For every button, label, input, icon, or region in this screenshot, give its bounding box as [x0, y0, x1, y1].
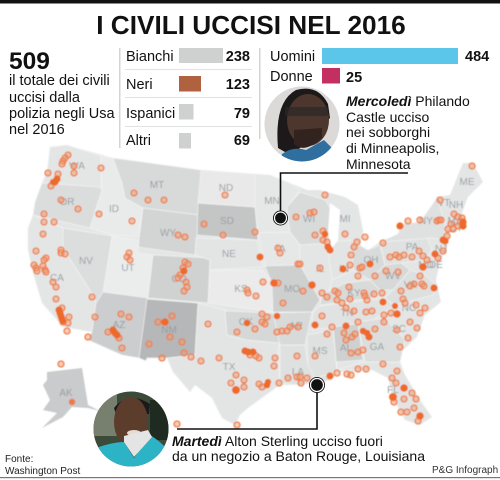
chart: victims by gender: Uomini [270, 49, 315, 65]
state labels: GA [370, 342, 385, 353]
state labels: SC [392, 324, 406, 335]
caption: Philando Castile [346, 93, 470, 172]
chart: victims by gender: 25 [346, 70, 362, 86]
caption: Philando Castile: Mercoledì Philando [346, 93, 470, 109]
chart: victims by ethnicity: 69 [234, 133, 250, 149]
state labels: AL [340, 343, 353, 354]
photo: Alton Sterling [93, 391, 170, 467]
state labels: IN [339, 264, 349, 275]
total figure: 509 [9, 48, 116, 138]
state labels: LA [292, 367, 304, 378]
state labels: WV [385, 271, 401, 282]
source: Washington Post [5, 466, 80, 477]
state labels: AZ [113, 320, 125, 331]
shooting location dots [31, 152, 475, 428]
chart: victims by gender [259, 48, 489, 139]
state labels: NC [402, 303, 416, 314]
chart: victims by ethnicity: Bianchi [126, 49, 174, 65]
total figure: 509: uccisi dalla [9, 90, 81, 106]
photo: Philando Castile [264, 86, 340, 162]
state labels: SD [220, 216, 234, 227]
US map [28, 145, 483, 428]
state labels: TX [223, 362, 236, 373]
state labels: WI [303, 214, 315, 225]
chart: victims by ethnicity: 123 [226, 77, 250, 93]
state labels: WA [69, 161, 85, 172]
state labels: IL [316, 264, 325, 275]
state labels: IA [276, 244, 286, 255]
state labels: MS [312, 346, 328, 357]
source: Fonte: [5, 454, 33, 465]
state labels: NE [222, 249, 236, 260]
caption: Philando Castile: Minnesota [346, 156, 411, 172]
state labels [50, 161, 475, 396]
state labels: OH [364, 255, 378, 266]
chart: victims by ethnicity: Altri [126, 133, 151, 149]
title: I CIVILI UCCISI NEL 2016 [96, 10, 406, 40]
state labels: ME [460, 177, 475, 188]
chart: victims by gender: Donne [270, 69, 313, 85]
state labels: OK [239, 317, 254, 328]
chart: victims by ethnicity: Ispanici [126, 106, 175, 122]
caption: Philando Castile: nei sobborghi [346, 124, 430, 140]
state labels: CO [172, 274, 187, 285]
state labels: WY [160, 228, 176, 239]
chart: victims by gender: 484 [465, 49, 489, 65]
total figure: 509: 509 [9, 48, 50, 75]
state labels: FL [387, 385, 399, 396]
chart: victims by ethnicity: 79 [234, 106, 250, 122]
chart: victims by ethnicity [119, 48, 252, 149]
Alaska [42, 368, 100, 428]
caption: Alton Sterling: Martedì Alton Sterling ucciso fuori [172, 433, 383, 449]
credit: P&G Infograph [432, 465, 498, 476]
state labels: ND [219, 183, 233, 194]
state labels: NM [161, 325, 177, 336]
state labels: ID [109, 204, 119, 215]
state labels: KY [347, 288, 361, 299]
state labels: MA [448, 216, 463, 227]
Alaska: AK [59, 388, 73, 399]
state labels: CA [50, 273, 64, 284]
state labels: KS [234, 284, 248, 295]
source [5, 454, 80, 477]
caption: Philando Castile: di Minneapolis, [346, 140, 439, 156]
state labels: AR [289, 321, 303, 332]
state labels: NY [419, 216, 433, 227]
caption: Philando Castile: Castle ucciso [346, 109, 429, 125]
chart: victims by ethnicity: Neri [126, 77, 153, 93]
leader line and marker: Baton Rouge [177, 377, 325, 429]
state labels: VT [438, 198, 450, 209]
caption: Alton Sterling [172, 433, 425, 464]
total figure: 509: polizia negli Usa [9, 106, 116, 122]
total figure: 509: il totale dei civili [9, 73, 110, 89]
clusters of multiple shootings [50, 176, 466, 419]
state labels: VA [404, 280, 417, 291]
state labels: MO [284, 284, 300, 295]
caption: Alton Sterling: da un negozio a Baton Rouge, Louisiana [172, 448, 425, 464]
state labels: MT [150, 180, 164, 191]
leader line and marker: Minnesota [273, 173, 408, 226]
state labels: MN [264, 196, 280, 207]
state labels: NH [449, 200, 463, 211]
state labels: OR [60, 197, 74, 208]
state labels: NV [79, 256, 93, 267]
chart: victims by ethnicity: 238 [226, 49, 250, 65]
total figure: 509: nel 2016 [9, 122, 65, 138]
state labels: TN [340, 308, 354, 319]
state labels: CT [449, 223, 463, 234]
state labels: NJ [435, 244, 447, 255]
state labels: MI [339, 214, 351, 225]
state labels: PA [406, 242, 419, 253]
state labels: DE [429, 260, 443, 271]
state labels: UT [121, 263, 135, 274]
state labels: MD [418, 260, 434, 271]
